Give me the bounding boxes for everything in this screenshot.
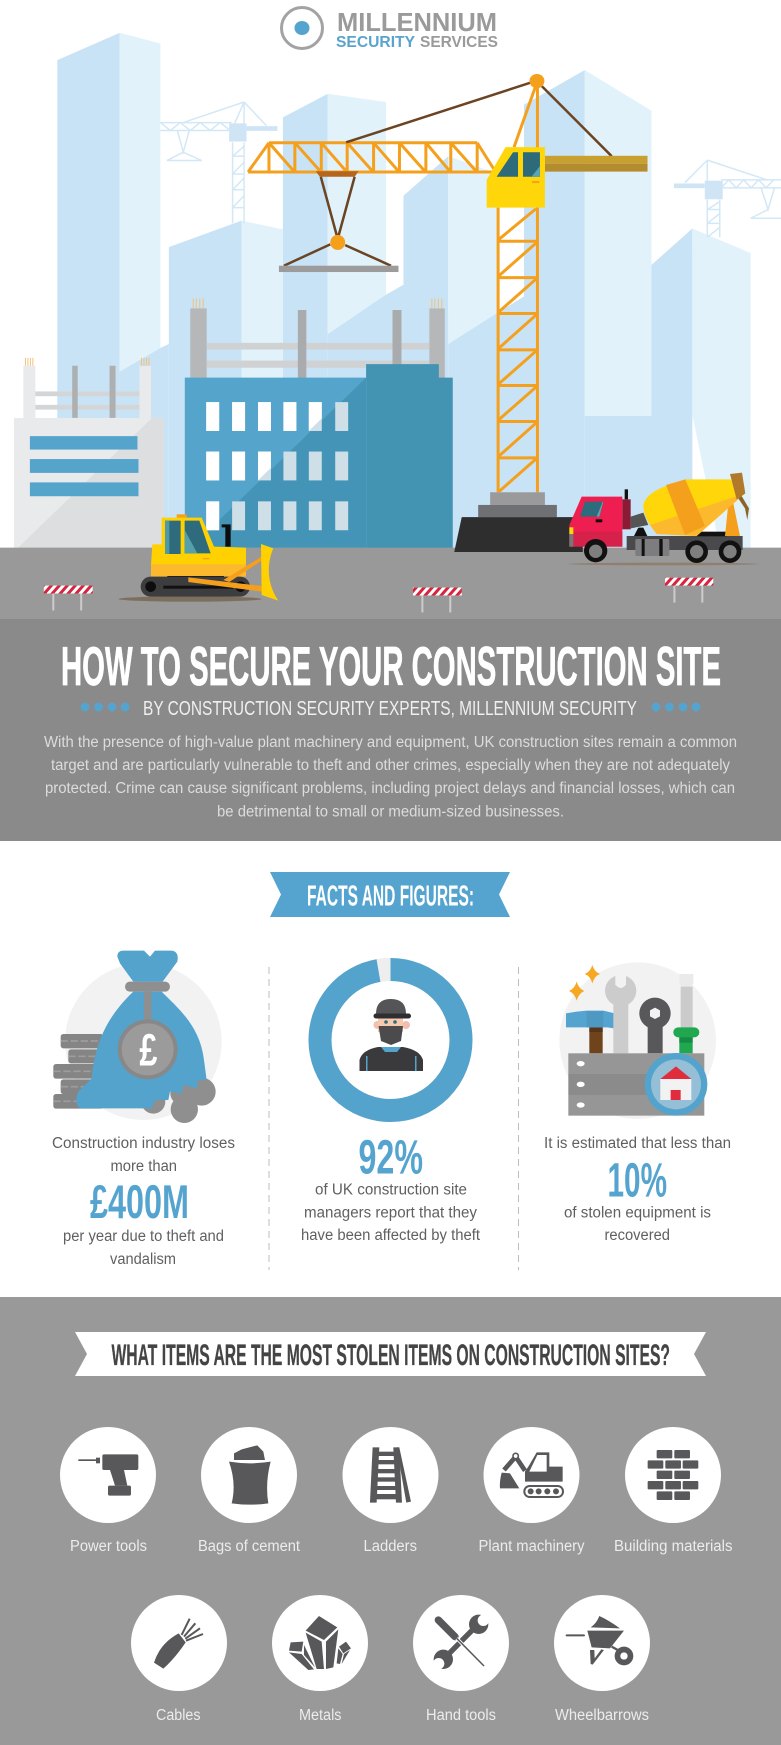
subtitle: BY CONSTRUCTION SECURITY EXPERTS, MILLENNIUM SECURITY — [143, 698, 637, 720]
stat text: per year due to theft and — [63, 1228, 224, 1245]
stat text: managers report that they — [304, 1204, 477, 1222]
stat text: recovered — [604, 1227, 670, 1244]
stat: £400M losses — [52, 951, 235, 1268]
blue building under construction — [185, 299, 453, 554]
item: bags of cement — [198, 1427, 301, 1555]
hero illustration: construction site — [0, 33, 781, 620]
banner: facts and figures: FACTS AND FIGURES: — [307, 880, 474, 912]
item: plant machinery — [478, 1427, 585, 1555]
stat: 92% of managers — [301, 970, 481, 1244]
icon: money bag: £ — [139, 1024, 157, 1075]
icon: cement mixer truck — [568, 473, 758, 565]
item: power tools — [60, 1427, 156, 1555]
intro paragraph — [44, 734, 737, 820]
item: building materials — [614, 1427, 733, 1555]
item: hand tools: Hand tools — [426, 1707, 496, 1724]
company logo: SECURITY — [336, 34, 415, 51]
column dividers — [269, 967, 518, 1270]
icon: money bag — [53, 951, 222, 1123]
item: wheelbarrows — [554, 1595, 650, 1724]
stat text: vandalism — [110, 1251, 176, 1268]
panel: most stolen items — [0, 1297, 781, 1745]
item: wheelbarrows: Wheelbarrows — [555, 1707, 649, 1724]
icon: bulldozer — [118, 514, 278, 602]
item: hand tools — [413, 1595, 509, 1724]
stat text: of UK construction site — [315, 1182, 467, 1198]
distant crane right — [674, 160, 781, 237]
icon: masked thief — [360, 999, 423, 1071]
background skyline buildings — [57, 33, 751, 548]
road barriers — [44, 578, 713, 612]
item: bags of cement: Bags of cement — [198, 1538, 301, 1555]
company logo — [282, 7, 498, 51]
item: power tools: Power tools — [70, 1538, 147, 1555]
stat text — [301, 1132, 481, 1244]
stat text: 10% — [608, 1154, 667, 1208]
stat text — [544, 1135, 731, 1244]
stat text: It is estimated that less than — [544, 1135, 731, 1152]
donut chart: 92% — [320, 970, 461, 1110]
icon: toolbox — [559, 962, 716, 1119]
stat text: £400M — [90, 1175, 189, 1228]
stat text: have been affected by theft — [301, 1227, 481, 1244]
stat text — [52, 1135, 235, 1268]
item: ladders: Ladders — [364, 1538, 417, 1555]
item: cables — [131, 1595, 227, 1724]
stat text: Construction industry loses — [52, 1135, 235, 1152]
item: plant machinery: Plant machinery — [478, 1538, 585, 1555]
intro paragraph: protected. Crime can cause significant problems, including project delays and financial losses, which can — [45, 780, 735, 797]
stat: 10% recovered — [544, 962, 731, 1244]
tower crane — [248, 74, 648, 552]
item: metals — [272, 1595, 368, 1724]
item: building materials: Building materials — [614, 1538, 733, 1555]
item: metals: Metals — [299, 1707, 342, 1724]
white building under construction — [14, 358, 164, 551]
banner: most stolen heading — [75, 1332, 706, 1376]
stat text: more than — [110, 1158, 177, 1175]
stat text: of stolen equipment is — [564, 1204, 711, 1222]
banner: facts and figures — [270, 872, 510, 917]
subtitle dots — [81, 703, 700, 711]
stat text: 92% — [358, 1132, 423, 1184]
distant crane left — [160, 102, 277, 223]
item: cables: Cables — [156, 1707, 201, 1724]
item: ladders — [342, 1427, 438, 1555]
ground — [0, 548, 781, 620]
intro paragraph: target and are particularly vulnerable to theft and other crimes, especially when they are not adequately — [51, 757, 730, 774]
intro paragraph: be detrimental to small or medium-sized businesses. — [217, 804, 564, 820]
intro paragraph: With the presence of high-value plant machinery and equipment, UK construction sites remain a common — [44, 734, 737, 751]
crane cab — [487, 147, 545, 208]
panel: intro header — [0, 619, 781, 841]
company logo: SERVICES — [420, 34, 498, 51]
company logo: MILLENNIUM — [337, 7, 497, 37]
